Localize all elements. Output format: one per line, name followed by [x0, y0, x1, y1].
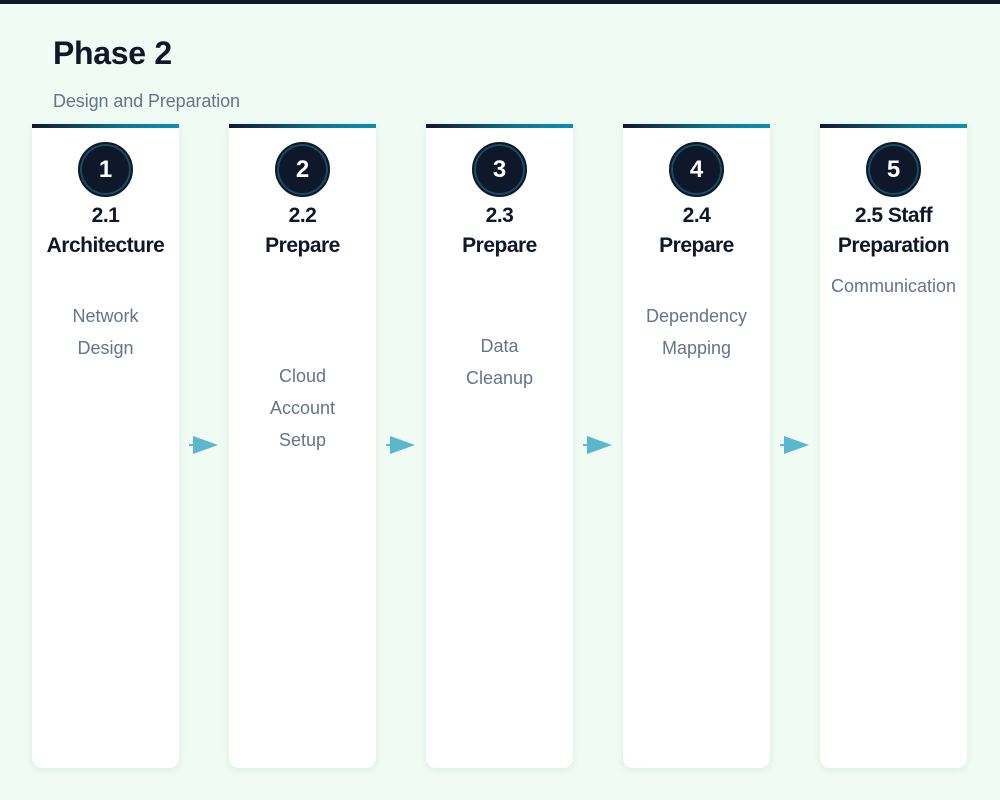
- description: [72, 306, 138, 358]
- icon: number 1: 1: [99, 156, 112, 183]
- icon: number 4: 4: [690, 156, 703, 183]
- description: [270, 366, 335, 450]
- arrow: [780, 436, 809, 454]
- heading 2.2: [265, 204, 340, 257]
- heading 2.5: 2.5 Staff: [855, 204, 932, 227]
- description: Communication: [831, 276, 956, 296]
- heading 2.4: [659, 204, 734, 257]
- icon: number 5: 5: [887, 156, 900, 183]
- heading 2.1: [47, 204, 164, 257]
- heading 2.1: Architecture: [47, 234, 164, 257]
- heading 2.3: [462, 204, 537, 257]
- icon: number 3: 3: [493, 156, 506, 183]
- title: Phase 2: [53, 35, 172, 71]
- panel: step 5: [820, 124, 967, 768]
- description: [646, 306, 747, 358]
- icon: number 4: [669, 142, 724, 197]
- panel: step 3: [426, 124, 573, 768]
- description: [466, 336, 533, 388]
- description: Dependency: [646, 306, 747, 326]
- icon: number 2: [275, 142, 330, 197]
- heading 2.2: 2.2: [289, 204, 316, 227]
- heading 2.5: [838, 204, 949, 257]
- description: Network: [72, 306, 138, 326]
- description: Data: [480, 336, 519, 356]
- heading 2.5: Preparation: [838, 234, 949, 257]
- icon: number 1: [78, 142, 133, 197]
- description: Mapping: [662, 338, 731, 358]
- panel: step 4: [623, 124, 770, 768]
- panel: step 1: [32, 124, 179, 768]
- icon: number 3: [472, 142, 527, 197]
- description: Account: [270, 398, 335, 418]
- icon: number 2: 2: [296, 156, 309, 183]
- description: Design: [77, 338, 134, 358]
- arrow: [189, 436, 218, 454]
- subtitle: Design and Preparation: [53, 91, 240, 111]
- heading 2.3: 2.3: [486, 204, 513, 227]
- description: Cleanup: [466, 368, 533, 388]
- panel: step 2: [229, 124, 376, 768]
- arrow: [386, 436, 415, 454]
- heading 2.2: Prepare: [265, 234, 340, 257]
- heading 2.4: Prepare: [659, 234, 734, 257]
- heading 2.3: Prepare: [462, 234, 537, 257]
- icon: number 5: [866, 142, 921, 197]
- heading 2.1: 2.1: [92, 204, 119, 227]
- description: Setup: [279, 430, 326, 450]
- arrow: [583, 436, 612, 454]
- heading 2.4: 2.4: [683, 204, 710, 227]
- description: Cloud: [279, 366, 326, 386]
